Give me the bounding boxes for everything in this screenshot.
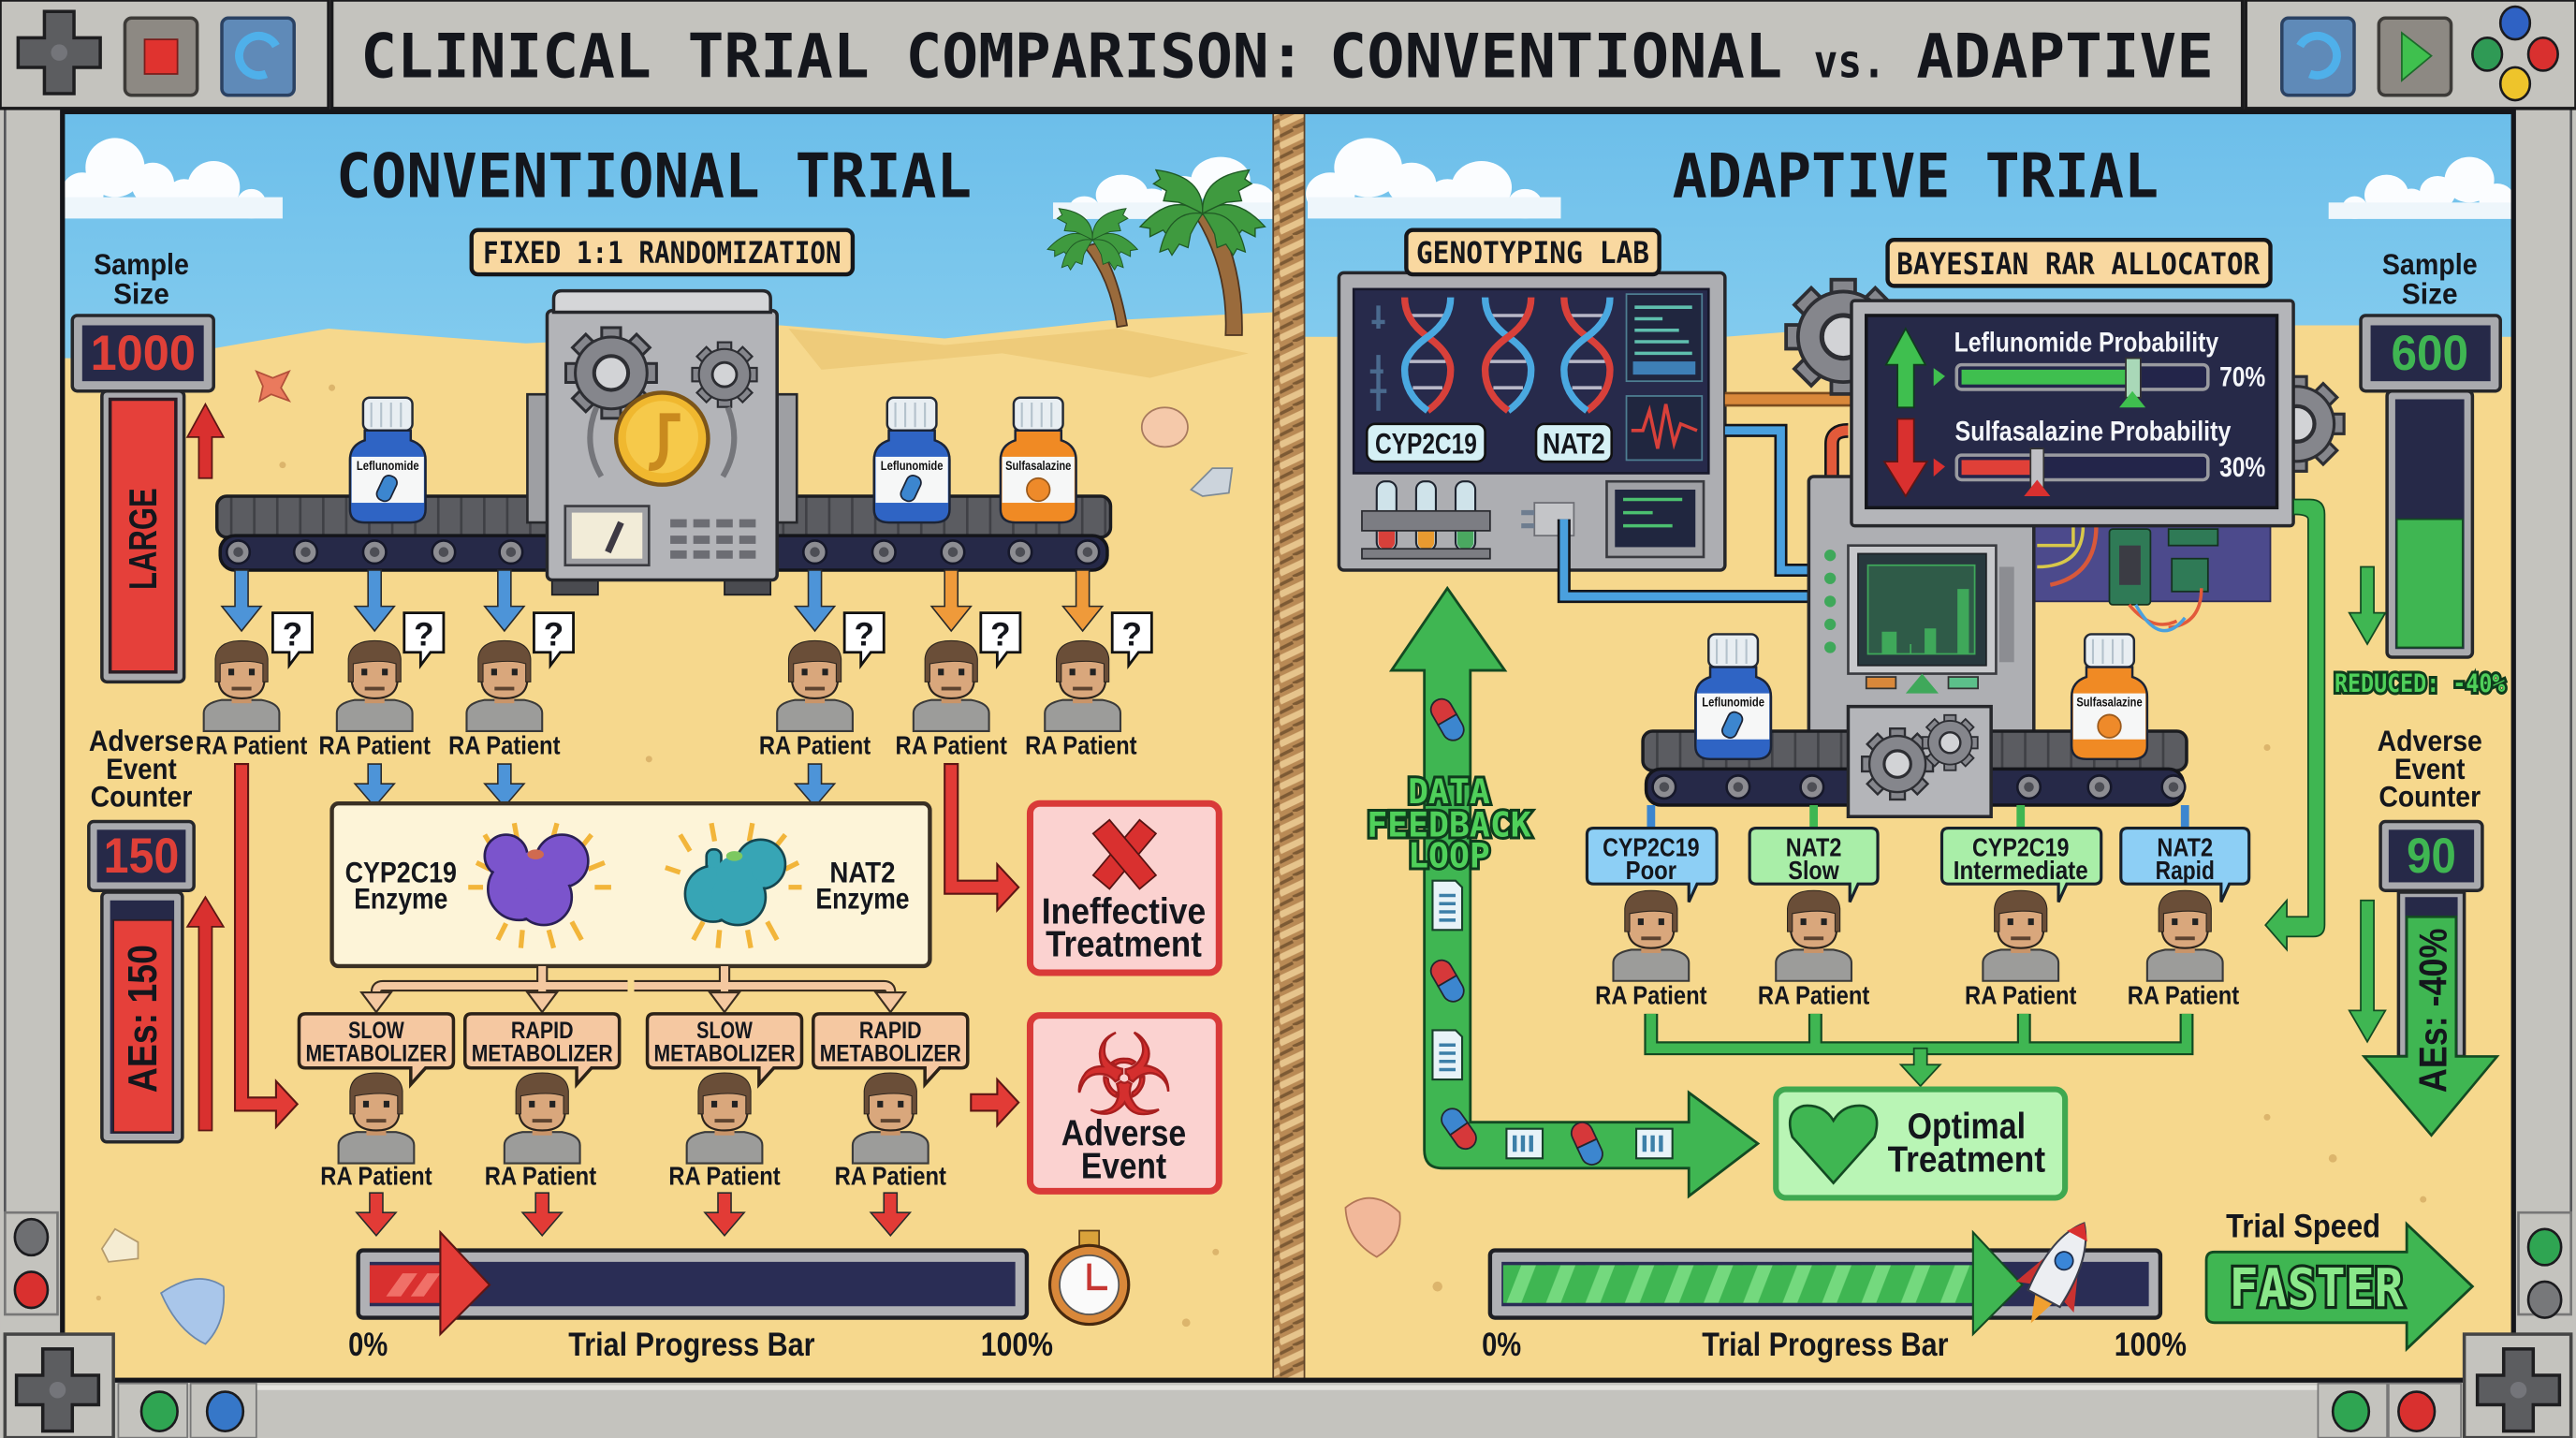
enzyme panel: Enzyme — [815, 882, 909, 916]
patients row: conventional top: ? — [990, 617, 1011, 653]
rotation arcs — [590, 407, 734, 477]
enzyme panel: CYP2C19 — [345, 855, 457, 888]
metabolizer labels: SLOW — [348, 1019, 404, 1044]
arrow: data feedback loop — [1367, 588, 1758, 1196]
sample size gauge: conventional: Sample — [94, 247, 189, 281]
small gel readouts — [1370, 305, 1386, 411]
icon: colour buttons — [2472, 7, 2558, 100]
gear box — [1848, 707, 1991, 816]
patients row: conventional top: RA Patient — [448, 731, 561, 760]
heading: conventional trial: CONVENTIONAL TRIAL — [336, 142, 972, 213]
arrow: green feedback into patients — [2265, 500, 2324, 949]
conveyor: conventional — [217, 496, 1110, 570]
feedback items — [1427, 695, 1673, 1168]
patients row: conventional top: RA Patient — [759, 731, 871, 760]
allocator panel: 30% — [2219, 452, 2265, 483]
patients row: adaptive: RA Patient — [1965, 980, 2076, 1009]
allocator panel: Sulfasalazine Probability — [1955, 416, 2232, 447]
adverse event counter: conventional — [89, 724, 224, 1142]
slider: leflunomide 70% — [1934, 359, 2208, 407]
enzyme panel: Enzyme — [354, 882, 447, 916]
sample size gauge: adaptive: Size — [2402, 277, 2458, 311]
label: fixed randomization — [472, 230, 853, 274]
patients row: conventional bottom — [320, 1073, 946, 1236]
arrow: AE up — [187, 897, 224, 1130]
bottle: leflunomide right — [874, 398, 949, 522]
genotype bubble text: Poor — [1626, 856, 1676, 885]
bottle: leflunomide left — [350, 398, 426, 522]
progress bar: conventional — [348, 1232, 1053, 1363]
genotype bubble text: Intermediate — [1954, 856, 2088, 885]
patients row: conventional top: RA Patient — [896, 731, 1007, 760]
right side buttons — [2519, 1212, 2571, 1318]
arrow: red path to metabolizers — [235, 764, 298, 1127]
outcome: adverse event: Event — [1081, 1146, 1166, 1186]
adverse event counter: adaptive: Event — [2394, 752, 2466, 785]
bottle: sulfasalazine adaptive: Sulfasalazine — [2076, 695, 2143, 710]
title: CLINICAL TRIAL COMPARISON: — [360, 22, 1305, 92]
adverse event counter: conventional: Adverse — [89, 724, 194, 757]
genotype bubble text: CYP2C19 — [1603, 832, 1700, 861]
small terminal — [1606, 481, 1704, 557]
sample size gauge: conventional: Size — [113, 277, 169, 311]
top bar: title cell — [332, 0, 2243, 109]
outcome: optimal treatment: Optimal — [1908, 1107, 2026, 1147]
title — [360, 22, 2214, 92]
outcome: optimal treatment — [1776, 1090, 2065, 1197]
decoration: white shell — [102, 1229, 138, 1262]
bottom right controls — [2318, 1334, 2571, 1438]
title: CONVENTIONAL — [1329, 22, 1782, 92]
bottle: leflunomide adaptive — [1695, 634, 1771, 759]
outcome: ineffective treatment: Treatment — [1046, 924, 1202, 964]
icon: teal enzyme — [666, 823, 802, 948]
adverse event counter: adaptive: AEs: -40% — [2410, 929, 2454, 1093]
enzyme panel: NAT2 — [829, 855, 896, 888]
left side buttons — [5, 1212, 57, 1314]
patients row: conventional bottom: RA Patient — [668, 1161, 781, 1190]
panel: conventional trial scene background — [61, 111, 1275, 1380]
outcome: ineffective treatment — [1030, 803, 1219, 973]
sand speckles — [96, 385, 2426, 1327]
circuit board — [2034, 526, 2271, 631]
randomization machine — [527, 291, 797, 594]
rope divider — [1273, 111, 1305, 1380]
allocator panel: 70% — [2219, 361, 2265, 392]
adverse event counter: adaptive: Counter — [2378, 780, 2481, 814]
heading: adaptive trial: ADAPTIVE TRIAL — [1673, 142, 2159, 213]
progress bar: adaptive: 0% — [1482, 1327, 1521, 1363]
metabolizer labels — [299, 1014, 968, 1084]
progress bar: conventional: 100% — [981, 1327, 1053, 1363]
panel: adaptive trial scene background — [1305, 111, 2515, 1380]
adverse event counter: adaptive: 90 — [2407, 829, 2456, 884]
conveyor: adaptive — [1643, 731, 2187, 805]
decoration: scallop shell — [1345, 1198, 1400, 1257]
patients row: adaptive: RA Patient — [2128, 980, 2239, 1009]
icon: stopwatch — [1050, 1231, 1129, 1325]
decoration: peach shell — [1142, 407, 1188, 447]
genotype bubble text: Rapid — [2156, 856, 2215, 885]
allocator panel — [1852, 301, 2293, 526]
bottle: leflunomide right: Leflunomide — [881, 458, 944, 473]
enzyme panel — [332, 803, 929, 966]
icon: large gear — [565, 328, 656, 418]
genotype bubble text: NAT2 — [2157, 832, 2213, 861]
arrow: sample up — [187, 404, 224, 478]
outcome: adverse event — [1030, 1011, 1219, 1191]
progress bar: adaptive: Trial Progress Bar — [1702, 1327, 1949, 1363]
bottle: leflunomide left: Leflunomide — [357, 458, 419, 473]
arrow: sulfasalazine down — [1884, 419, 1927, 496]
slider: sulfasalazine 30% — [1934, 448, 2208, 496]
metabolizer labels: METABOLIZER — [305, 1042, 447, 1067]
decoration: grey shell — [1191, 468, 1232, 496]
arrow: sample down — [2349, 566, 2385, 644]
bottle: sulfasalazine — [1001, 398, 1076, 522]
bottom left controls — [5, 1334, 256, 1438]
gears behind allocator — [1786, 280, 2344, 471]
adaptive machine — [1808, 477, 2034, 772]
metabolizer labels: SLOW — [696, 1019, 754, 1044]
trial speed indicator: FASTER — [2230, 1258, 2404, 1319]
patients row: conventional bottom: RA Patient — [485, 1161, 596, 1190]
patients row: conventional top: RA Patient — [196, 731, 307, 760]
bottom bar highlight — [256, 1385, 2318, 1390]
icon: stop button — [124, 18, 198, 95]
title: ADAPTIVE — [1916, 22, 2214, 92]
genotype bubbles — [1587, 829, 2249, 902]
patients row: conventional top: ? — [854, 617, 874, 653]
stems to genotype labels — [1651, 805, 2185, 829]
icon: heart — [1790, 1106, 1877, 1183]
adverse event counter: adaptive — [2349, 724, 2497, 1136]
frame edge lines — [5, 109, 2571, 1212]
outcome: adverse event: Adverse — [1061, 1113, 1186, 1153]
patients row: conventional top: ? — [414, 617, 434, 653]
icon: small gear — [692, 343, 757, 407]
label: data feedback loop: DATA — [1408, 771, 1490, 812]
icon: play button — [2378, 18, 2452, 95]
connectors: enzyme to metabolizers — [361, 966, 905, 1012]
metabolizer labels: RAPID — [511, 1019, 574, 1044]
adverse event counter: conventional: AEs: 150 — [120, 945, 166, 1093]
progress bar: conventional: Trial Progress Bar — [568, 1327, 815, 1363]
patients row: adaptive — [1595, 890, 2239, 1009]
metabolizer labels: METABOLIZER — [654, 1042, 796, 1067]
arrows: blue into enzyme box — [355, 764, 835, 807]
label: NAT2: NAT2 — [1543, 426, 1605, 460]
label: data feedback loop: LOOP — [1408, 836, 1490, 876]
label: reduced: REDUCED: -40% — [2334, 670, 2506, 698]
label: genotyping lab: GENOTYPING LAB — [1416, 237, 1649, 271]
label: fixed randomization: FIXED 1:1 RANDOMIZATION — [483, 237, 842, 271]
outcome: optimal treatment: Treatment — [1888, 1139, 2045, 1180]
decoration: blue shell — [161, 1279, 224, 1344]
adverse event counter: conventional: Counter — [91, 780, 192, 814]
label: data feedback loop — [1367, 771, 1532, 876]
connector: patients to optimal treatment — [1651, 1014, 2187, 1086]
outcome: ineffective treatment: Ineffective — [1042, 891, 1206, 932]
top bar: left control cell — [0, 0, 329, 109]
icon: dna helices — [1405, 298, 1610, 411]
lab station: genotyping — [1339, 272, 1725, 570]
patients row: conventional top: RA Patient — [319, 731, 431, 760]
sample size gauge: adaptive — [2334, 247, 2506, 698]
monitor with bar chart — [1848, 546, 1996, 674]
arrow: leflunomide up — [1886, 329, 1925, 407]
adverse event counter: conventional: Event — [106, 752, 177, 785]
adverse event counter: adaptive: Adverse — [2378, 724, 2482, 757]
sample size gauge: adaptive: Sample — [2382, 247, 2478, 281]
bottle: sulfasalazine: Sulfasalazine — [1005, 458, 1071, 473]
genotype bubble text: CYP2C19 — [1972, 832, 2070, 861]
data pipes — [1564, 399, 1853, 596]
metabolizer labels: RAPID — [859, 1019, 922, 1044]
progress bar: conventional: 0% — [348, 1327, 388, 1363]
progress bar: adaptive: 100% — [2115, 1327, 2187, 1363]
bottle: leflunomide adaptive: Leflunomide — [1702, 695, 1764, 710]
arrow: to adverse event — [971, 1079, 1018, 1125]
icon: restart button — [222, 18, 294, 95]
patients row: adaptive: RA Patient — [1595, 980, 1707, 1009]
metabolizer labels: METABOLIZER — [472, 1042, 613, 1067]
title: vs. — [1814, 34, 1886, 88]
patients row: conventional top: ? — [1122, 617, 1142, 653]
trial speed indicator: Trial Speed — [2226, 1209, 2380, 1245]
icon: gauge — [565, 506, 649, 565]
allocator panel: Leflunomide Probability — [1954, 328, 2219, 359]
test tube rack — [1362, 481, 1490, 559]
label: data feedback loop: FEEDBACK — [1367, 804, 1532, 844]
icon: d-pad — [18, 11, 100, 94]
label: CYP2C19: CYP2C19 — [1375, 426, 1477, 460]
label: bayesian allocator: BAYESIAN RAR ALLOCATOR — [1896, 248, 2261, 282]
arrow: red path to ineffective — [944, 764, 1018, 910]
arrow: AE down — [2349, 901, 2385, 1042]
sample size gauge: conventional: LARGE — [121, 488, 165, 590]
button grid — [670, 520, 755, 559]
palm trees — [1047, 157, 1265, 335]
progress bar: adaptive — [1482, 1208, 2187, 1363]
metabolizer labels: METABOLIZER — [820, 1042, 961, 1067]
adverse event counter: conventional: 150 — [104, 829, 179, 884]
sample size gauge: conventional — [72, 247, 224, 682]
patients row: conventional bottom: RA Patient — [320, 1161, 432, 1190]
patients row: conventional top: ? — [283, 617, 302, 653]
icon: rocket — [2002, 1208, 2114, 1339]
icon: purple enzyme — [468, 823, 611, 948]
icon: rewind button — [2282, 18, 2354, 95]
sample size gauge: adaptive: 600 — [2392, 326, 2468, 381]
patients row: conventional bottom: RA Patient — [835, 1161, 946, 1190]
top bar: right control cell — [2246, 0, 2576, 109]
outcome: adverse event: ☣ — [1074, 1011, 1174, 1141]
ECG panel — [1627, 396, 1702, 460]
bottle: sulfasalazine adaptive — [2071, 634, 2147, 759]
sample size gauge: conventional: 1000 — [91, 326, 196, 381]
small data panel — [1627, 294, 1702, 381]
icon: gold coin — [616, 392, 708, 485]
decoration: starfish — [256, 372, 289, 401]
patients row: adaptive: RA Patient — [1758, 980, 1869, 1009]
genotype bubble text: NAT2 — [1786, 832, 1841, 861]
patients row: conventional top: RA Patient — [1025, 731, 1137, 760]
trial speed indicator — [2206, 1209, 2472, 1349]
genotype bubble text: Slow — [1788, 856, 1839, 885]
genotype bubble text — [1603, 832, 2215, 885]
patients row: conventional top — [196, 570, 1151, 760]
label: bayesian allocator — [1888, 240, 2271, 286]
patients row: conventional top: ? — [544, 617, 564, 653]
